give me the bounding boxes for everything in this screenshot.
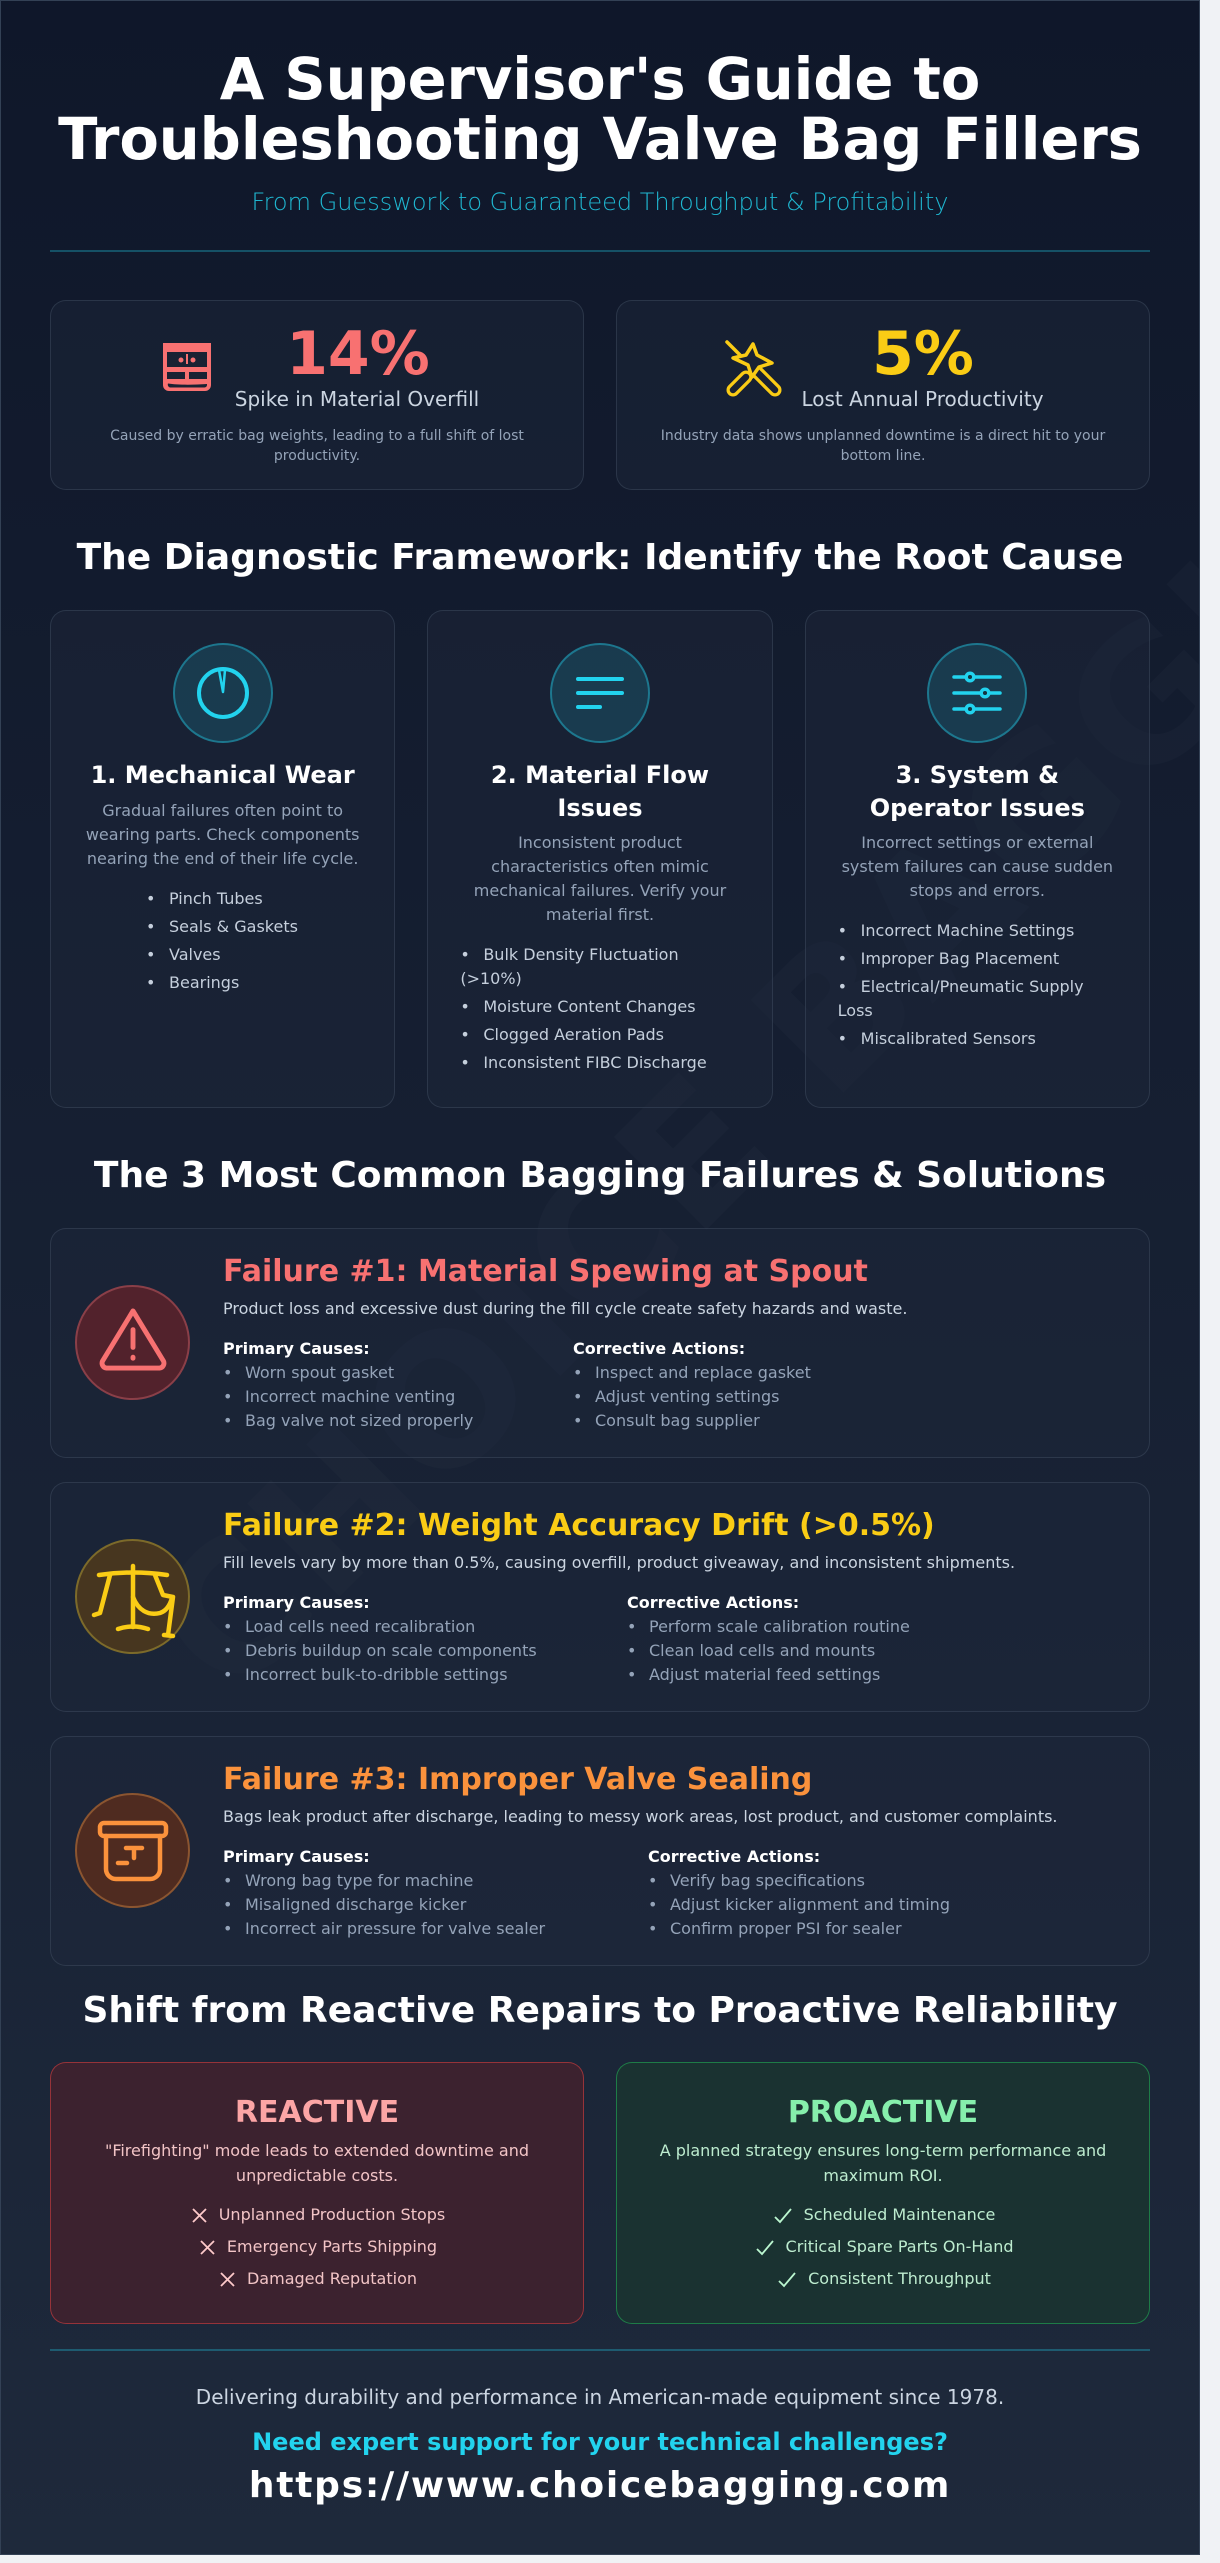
primary causes: • bbox=[223, 1411, 232, 1430]
card title: Issues bbox=[557, 794, 643, 822]
primary causes: Incorrect machine venting bbox=[245, 1387, 455, 1406]
icon: scale bbox=[163, 343, 211, 391]
card title: Operator Issues bbox=[870, 794, 1085, 822]
icon: balance scale bbox=[75, 1539, 190, 1654]
primary causes bbox=[223, 1847, 546, 1938]
list: • bbox=[146, 973, 155, 992]
item: Scheduled Maintenance bbox=[804, 2205, 995, 2224]
list: Valves bbox=[169, 945, 221, 964]
item: Critical Spare Parts On-Hand bbox=[786, 2237, 1013, 2256]
primary causes: Primary Causes: bbox=[223, 1593, 370, 1612]
stat number: 14% bbox=[286, 319, 430, 389]
primary causes: • bbox=[223, 1363, 232, 1382]
stat description: Industry data shows unplanned downtime is a direct hit to your bottom line. bbox=[661, 428, 1105, 464]
stat number: 5% bbox=[872, 319, 974, 389]
corrective actions: Consult bag supplier bbox=[595, 1411, 760, 1430]
subtitle: From Guesswork to Guaranteed Throughput & Profitability bbox=[252, 188, 948, 216]
card description: Incorrect settings or external system failures can cause sudden stops and errors. bbox=[842, 833, 1113, 900]
primary causes: • bbox=[223, 1387, 232, 1406]
footer call to action: Need expert support for your technical challenges? bbox=[252, 2428, 948, 2456]
card title: 3. System & bbox=[896, 761, 1059, 789]
list: • bbox=[838, 977, 847, 996]
corrective actions: Verify bag specifications bbox=[670, 1871, 865, 1890]
panel: overfill stat bbox=[50, 300, 584, 490]
list: • bbox=[146, 889, 155, 908]
comparison description: "Firefighting" mode leads to extended downtime and unpredictable costs. bbox=[105, 2141, 529, 2184]
list: • bbox=[460, 1053, 470, 1072]
list: • bbox=[838, 1029, 847, 1048]
primary causes: Misaligned discharge kicker bbox=[245, 1895, 466, 1914]
list: Incorrect Machine Settings bbox=[861, 921, 1074, 940]
item: Damaged Reputation bbox=[247, 2269, 417, 2288]
list: • bbox=[460, 1025, 470, 1044]
item: Unplanned Production Stops bbox=[219, 2205, 445, 2224]
icon: sliders bbox=[927, 643, 1027, 743]
corrective actions: • bbox=[573, 1387, 582, 1406]
corrective actions: Adjust material feed settings bbox=[649, 1665, 880, 1684]
list: • bbox=[146, 945, 155, 964]
primary causes: Primary Causes: bbox=[223, 1847, 370, 1866]
corrective actions: • bbox=[648, 1871, 657, 1890]
failure description: Product loss and excessive dust during the fill cycle create safety hazards and waste. bbox=[223, 1299, 907, 1318]
item: Emergency Parts Shipping bbox=[227, 2237, 437, 2256]
failure description: Fill levels vary by more than 0.5%, causing overfill, product giveaway, and inconsistent shipments. bbox=[223, 1553, 1015, 1572]
primary causes: Wrong bag type for machine bbox=[245, 1871, 473, 1890]
card title: 2. Material Flow bbox=[491, 761, 709, 789]
failure description: Bags leak product after discharge, leading to messy work areas, lost product, and customer complaints. bbox=[223, 1807, 1058, 1826]
corrective actions: Corrective Actions: bbox=[627, 1593, 799, 1612]
corrective actions: • bbox=[648, 1895, 657, 1914]
heading: reactive to proactive: Shift from Reactive Repairs to Proactive Reliability bbox=[82, 1990, 1118, 2031]
corrective actions: Corrective Actions: bbox=[573, 1339, 745, 1358]
corrective actions: Clean load cells and mounts bbox=[649, 1641, 875, 1660]
title: Troubleshooting Valve Bag Fillers bbox=[58, 106, 1142, 173]
corrective actions: Inspect and replace gasket bbox=[595, 1363, 811, 1382]
comparison title: REACTIVE bbox=[235, 2095, 399, 2130]
list: Loss bbox=[838, 1001, 873, 1020]
primary causes: • bbox=[223, 1641, 232, 1660]
list: Clogged Aeration Pads bbox=[483, 1025, 664, 1044]
panel: reactive bbox=[50, 2062, 584, 2324]
list: Bearings bbox=[169, 973, 239, 992]
corrective actions: • bbox=[627, 1665, 636, 1684]
primary causes: • bbox=[223, 1919, 232, 1938]
panel: mechanical wear bbox=[50, 610, 395, 1108]
list: (>10%) bbox=[460, 969, 522, 988]
icon: warning bbox=[75, 1285, 190, 1400]
list: Electrical/Pneumatic Supply bbox=[861, 977, 1084, 996]
corrective actions: • bbox=[627, 1641, 636, 1660]
icon: gauge bbox=[173, 643, 273, 743]
list: • bbox=[460, 997, 470, 1016]
corrective actions bbox=[573, 1339, 811, 1430]
heading: common failures: The 3 Most Common Bagging Failures & Solutions bbox=[94, 1155, 1106, 1196]
list: Improper Bag Placement bbox=[861, 949, 1059, 968]
heading: diagnostic framework: The Diagnostic Framework: Identify the Root Cause bbox=[77, 537, 1123, 578]
icon: tools bbox=[725, 340, 782, 396]
panel: failure 3 bbox=[50, 1736, 1150, 1966]
panel: material flow bbox=[427, 610, 773, 1108]
list: • bbox=[146, 917, 155, 936]
panel: productivity stat bbox=[616, 300, 1150, 490]
list bbox=[146, 889, 298, 992]
primary causes: Bag valve not sized properly bbox=[245, 1411, 473, 1430]
comparison description: A planned strategy ensures long-term performance and maximum ROI. bbox=[660, 2141, 1106, 2184]
primary causes: Primary Causes: bbox=[223, 1339, 370, 1358]
footer url: https://www.choicebagging.com bbox=[249, 2465, 951, 2506]
list: Bulk Density Fluctuation bbox=[483, 945, 679, 964]
primary causes: Worn spout gasket bbox=[245, 1363, 394, 1382]
list: Pinch Tubes bbox=[169, 889, 263, 908]
item: Consistent Throughput bbox=[808, 2269, 991, 2288]
panel: failure 2 bbox=[50, 1482, 1150, 1712]
primary causes: • bbox=[223, 1871, 232, 1890]
corrective actions: • bbox=[573, 1411, 582, 1430]
card title bbox=[870, 761, 1085, 822]
corrective actions: Adjust kicker alignment and timing bbox=[670, 1895, 950, 1914]
title: A Supervisor's Guide to bbox=[220, 46, 980, 113]
corrective actions: • bbox=[627, 1617, 636, 1636]
corrective actions: • bbox=[648, 1919, 657, 1938]
comparison title: PROACTIVE bbox=[788, 2095, 978, 2130]
icon: bag box bbox=[75, 1793, 190, 1908]
panel: proactive bbox=[616, 2062, 1150, 2324]
card description: Gradual failures often point to wearing parts. Check components nearing the end of their life cycle. bbox=[86, 801, 359, 868]
corrective actions: Corrective Actions: bbox=[648, 1847, 820, 1866]
stat label: Lost Annual Productivity bbox=[801, 387, 1044, 411]
panel: system and operator bbox=[805, 610, 1150, 1108]
corrective actions bbox=[648, 1847, 950, 1938]
primary causes: Incorrect air pressure for valve sealer bbox=[245, 1919, 545, 1938]
list: Miscalibrated Sensors bbox=[861, 1029, 1036, 1048]
primary causes: Incorrect bulk-to-dribble settings bbox=[245, 1665, 508, 1684]
list: Inconsistent FIBC Discharge bbox=[483, 1053, 707, 1072]
list bbox=[460, 945, 707, 1072]
primary causes bbox=[223, 1339, 473, 1430]
list: Moisture Content Changes bbox=[483, 997, 696, 1016]
corrective actions bbox=[627, 1593, 910, 1684]
card description: Inconsistent product characteristics often mimic mechanical failures. Verify your material first. bbox=[474, 833, 726, 924]
corrective actions: Confirm proper PSI for sealer bbox=[670, 1919, 902, 1938]
corrective actions: Perform scale calibration routine bbox=[649, 1617, 910, 1636]
list: • bbox=[460, 945, 470, 964]
primary causes bbox=[223, 1593, 537, 1684]
stat description: Caused by erratic bag weights, leading to a full shift of lost productivity. bbox=[110, 428, 524, 464]
primary causes: • bbox=[223, 1895, 232, 1914]
corrective actions: • bbox=[573, 1363, 582, 1382]
panel: failure 1 bbox=[50, 1228, 1150, 1458]
list: • bbox=[838, 949, 847, 968]
list: Seals & Gaskets bbox=[169, 917, 298, 936]
title bbox=[58, 46, 1142, 173]
card title: 1. Mechanical Wear bbox=[91, 761, 355, 789]
list bbox=[838, 921, 1084, 1048]
failure title: Failure #3: Improper Valve Sealing bbox=[223, 1762, 812, 1797]
failure title: Failure #2: Weight Accuracy Drift (>0.5%) bbox=[223, 1508, 935, 1543]
primary causes: Load cells need recalibration bbox=[245, 1617, 475, 1636]
stat label: Spike in Material Overfill bbox=[235, 387, 479, 411]
footer tagline: Delivering durability and performance in American-made equipment since 1978. bbox=[196, 2385, 1004, 2409]
failure title: Failure #1: Material Spewing at Spout bbox=[223, 1254, 868, 1289]
primary causes: Debris buildup on scale components bbox=[245, 1641, 537, 1660]
card title bbox=[491, 761, 709, 822]
corrective actions: Adjust venting settings bbox=[595, 1387, 779, 1406]
list: • bbox=[838, 921, 847, 940]
primary causes: • bbox=[223, 1665, 232, 1684]
icon: flow lines bbox=[550, 643, 650, 743]
primary causes: • bbox=[223, 1617, 232, 1636]
